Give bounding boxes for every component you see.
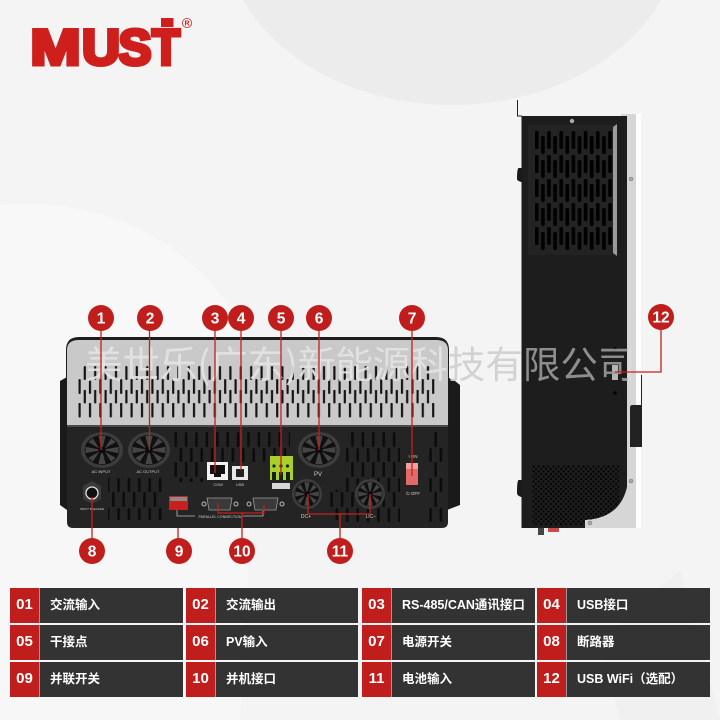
legend 02: 交流输出 — [226, 598, 276, 612]
port labels: I ON — [408, 454, 418, 459]
legend 12: USB WiFi（选配） — [577, 672, 683, 686]
DC+ fan — [292, 479, 322, 509]
legend 09 — [10, 662, 183, 697]
logo: MUST: U — [82, 20, 120, 76]
legend 07 — [362, 625, 535, 660]
port labels: ⏻ OFF — [406, 491, 420, 496]
callout 12 — [648, 304, 674, 330]
background: top ellipse — [224, 0, 680, 105]
side tabs — [60, 377, 460, 510]
legend 06: PV输入 — [226, 635, 268, 649]
background: bottom right shape — [600, 570, 720, 720]
mounting bracket — [518, 100, 522, 116]
black body — [67, 425, 448, 528]
callout numbers — [79, 304, 674, 564]
legend 04 — [537, 588, 710, 623]
logo: MUST: S — [118, 20, 152, 76]
callout 7 — [399, 305, 425, 331]
legend 10: 并机接口 — [226, 672, 276, 686]
callout 3: 3 — [211, 310, 220, 328]
vent recess — [528, 125, 617, 255]
port labels: USB — [236, 482, 244, 487]
inverter side view — [518, 100, 642, 535]
background: left white shape — [0, 204, 260, 440]
dry contact terminal — [270, 456, 293, 489]
port holes — [613, 347, 617, 395]
silver rear plate — [621, 114, 636, 528]
callout 10 — [229, 538, 255, 564]
port labels: INPUT BREAKER — [80, 507, 105, 511]
legend 05 — [10, 625, 183, 660]
legend 10 — [186, 662, 358, 697]
DC- fan — [355, 479, 385, 509]
port labels: COM — [213, 482, 223, 487]
legend 07: 07 — [368, 633, 385, 650]
legend 01: 01 — [16, 596, 33, 613]
callout 8 — [79, 538, 105, 564]
legend 04: USB接口 — [577, 598, 628, 612]
port labels: PV — [314, 472, 322, 478]
legend 03: RS-485/CAN通讯接口 — [402, 598, 525, 612]
callout 1 — [88, 305, 114, 331]
callout 5 — [268, 305, 294, 331]
callout 11: 11 — [332, 544, 349, 560]
legend 05: 05 — [16, 633, 33, 650]
parallel connector A — [202, 498, 238, 510]
watermark: 美世乐(广东)新能源科技有限公司 — [85, 334, 635, 389]
parallel bracket — [177, 510, 263, 516]
callout 1: 1 — [97, 310, 106, 328]
logo: MUST: T — [152, 20, 180, 76]
port labels: DC− — [366, 514, 376, 520]
legend 09: 并联开关 — [50, 672, 100, 686]
parallel connector B — [247, 498, 284, 510]
legend 08 — [537, 625, 710, 660]
legend 03: 03 — [368, 596, 385, 613]
legend 01: 交流输入 — [50, 598, 100, 612]
legend 02 — [186, 588, 358, 623]
legend 08: 08 — [543, 633, 560, 650]
port labels: AC INPUT — [92, 469, 111, 474]
silver top panel — [66, 337, 449, 425]
AC output fan — [128, 432, 170, 468]
logo: MUST: R — [184, 20, 190, 28]
top screw — [570, 119, 574, 123]
legend 07: 电源开关 — [402, 635, 452, 649]
bottom connectors — [538, 528, 559, 535]
background: lower shape — [0, 440, 255, 720]
legend 12: 12 — [543, 670, 560, 687]
wall bracket — [630, 375, 642, 447]
inverter front view — [60, 337, 460, 528]
callout 12: 12 — [652, 310, 670, 326]
port labels: AC OUTPUT — [136, 469, 160, 474]
legend 05: 干接点 — [50, 635, 88, 649]
rear screws — [588, 177, 634, 525]
callout 7: 7 — [408, 310, 416, 328]
callout 8: 8 — [88, 544, 97, 560]
legend 06 — [186, 625, 358, 660]
legend 11: 11 — [369, 670, 384, 687]
legend 04: 04 — [543, 596, 560, 613]
port labels — [80, 454, 420, 520]
callout 6: 6 — [315, 310, 324, 328]
legend table — [10, 588, 710, 697]
callout 6 — [306, 305, 332, 331]
legend 03 — [362, 588, 535, 623]
legend 09: 09 — [16, 670, 33, 687]
black body — [522, 116, 627, 528]
perforated vent — [532, 465, 619, 525]
callout 5: 5 — [277, 310, 286, 328]
silver panel slots — [77, 366, 439, 419]
COM port — [207, 462, 228, 480]
port labels: PARALLEL CONNECTION — [199, 515, 242, 519]
callout 11 — [327, 538, 353, 564]
AC input fan — [81, 432, 123, 468]
USB WiFi port — [612, 365, 618, 380]
USB port — [232, 466, 248, 480]
breaker — [83, 481, 101, 504]
legend 11 — [362, 662, 535, 697]
legend 11: 电池输入 — [402, 672, 452, 686]
callout 9 — [166, 538, 192, 564]
legend 08: 断路器 — [577, 635, 615, 649]
callout 2 — [137, 305, 163, 331]
side knobs — [518, 169, 522, 496]
legend 01 — [10, 588, 183, 623]
parallel DIP switch — [169, 496, 188, 510]
logo: MUST: M — [30, 20, 80, 76]
legend 02: 02 — [192, 596, 209, 613]
legend 10: 10 — [192, 670, 209, 687]
logo: MUST — [30, 18, 192, 76]
callout 4 — [228, 305, 254, 331]
port labels: DC+ — [301, 514, 311, 520]
callout 9: 9 — [175, 544, 184, 560]
callout 2: 2 — [146, 310, 154, 328]
vent slots — [534, 131, 613, 251]
legend 12 — [537, 662, 710, 697]
legend 06: 06 — [192, 633, 209, 650]
callout 4: 4 — [237, 310, 246, 328]
callout 3 — [202, 305, 228, 331]
callout leader lines — [92, 317, 661, 551]
callout 10: 10 — [233, 544, 251, 560]
body slots — [108, 432, 443, 522]
power switch — [406, 463, 418, 485]
PV fan — [298, 432, 340, 468]
